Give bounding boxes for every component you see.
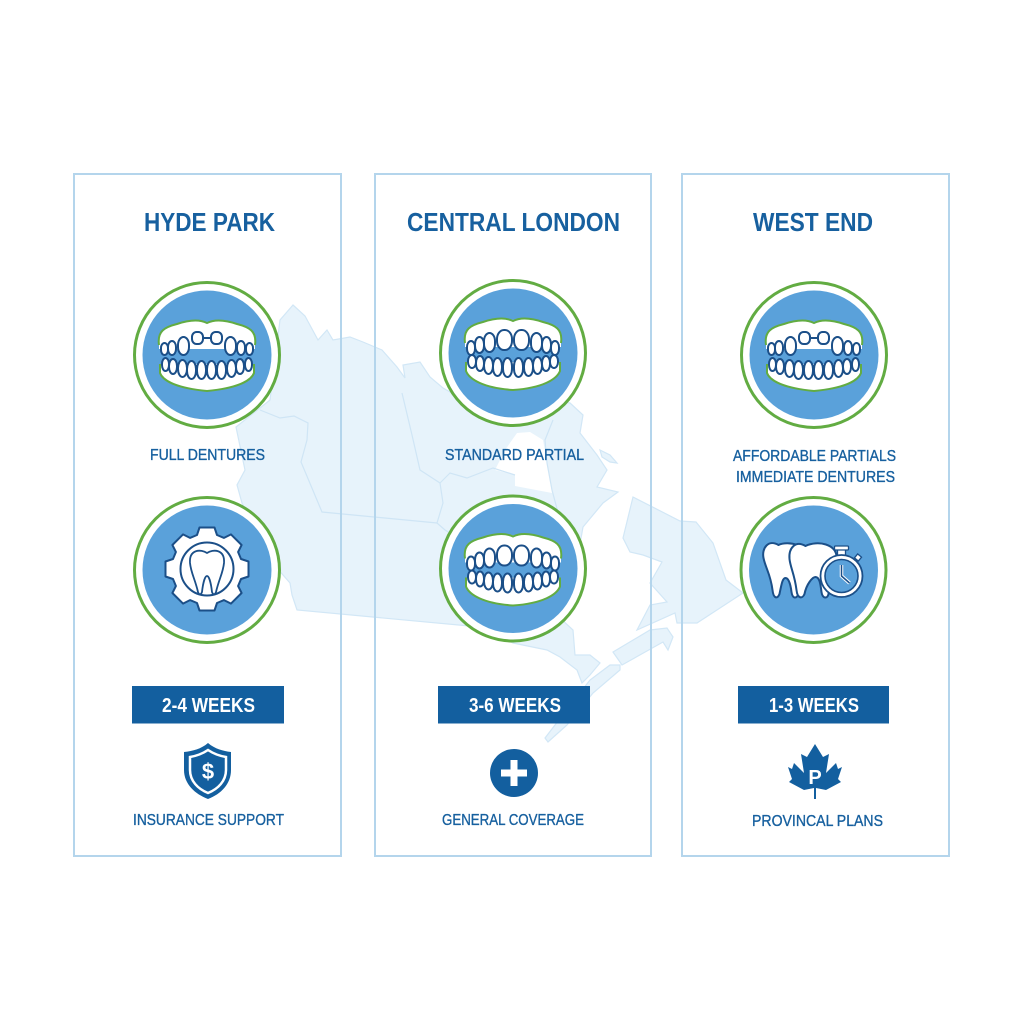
heading: Central London: CENTRAL LONDON	[407, 207, 620, 237]
icon: medical cross	[490, 749, 538, 797]
label: full dentures: FULL DENTURES	[150, 447, 265, 464]
label: general coverage: GENERAL COVERAGE	[442, 812, 584, 829]
icon: teeth with stopwatch	[741, 498, 886, 642]
badge: 2-4 weeks: 2-4 WEEKS	[162, 695, 255, 717]
icon: full arch dentures bottom	[440, 496, 586, 641]
heading: West End: WEST END	[753, 207, 873, 237]
label: standard partial: STANDARD PARTIAL	[445, 447, 584, 464]
label: affordable partials and immediate dentures: IMMEDIATE DENTURES	[736, 469, 895, 486]
badge: 1-3 weeks	[738, 686, 889, 724]
badge: 1-3 weeks: 1-3 WEEKS	[769, 695, 859, 717]
icon: insurance shield: $	[202, 759, 214, 784]
icon: tooth in gear	[134, 498, 280, 642]
panel: Hyde Park	[74, 174, 341, 856]
label: affordable partials and immediate dentures	[733, 448, 896, 486]
panel: West End	[682, 174, 949, 856]
label: insurance support: INSURANCE SUPPORT	[133, 812, 284, 829]
icon: full arch dentures top	[440, 280, 586, 426]
label: provincial plans: PROVINCAL PLANS	[752, 813, 883, 830]
label: affordable partials and immediate dentures: AFFORDABLE PARTIALS	[733, 448, 896, 465]
icon: dentures with gap	[742, 282, 886, 428]
icon: full dentures with gap	[134, 282, 280, 428]
icon: maple leaf with P: P	[808, 767, 822, 789]
badge: 3-6 weeks	[438, 686, 590, 724]
badge: 2-4 weeks	[132, 686, 284, 724]
background map of Canada	[236, 305, 743, 742]
badge: 3-6 weeks: 3-6 WEEKS	[469, 695, 561, 717]
icon: maple leaf with P	[788, 744, 842, 799]
heading: Hyde Park: HYDE PARK	[144, 207, 275, 237]
panel: Central London	[375, 174, 651, 856]
icon: insurance shield	[184, 743, 231, 799]
